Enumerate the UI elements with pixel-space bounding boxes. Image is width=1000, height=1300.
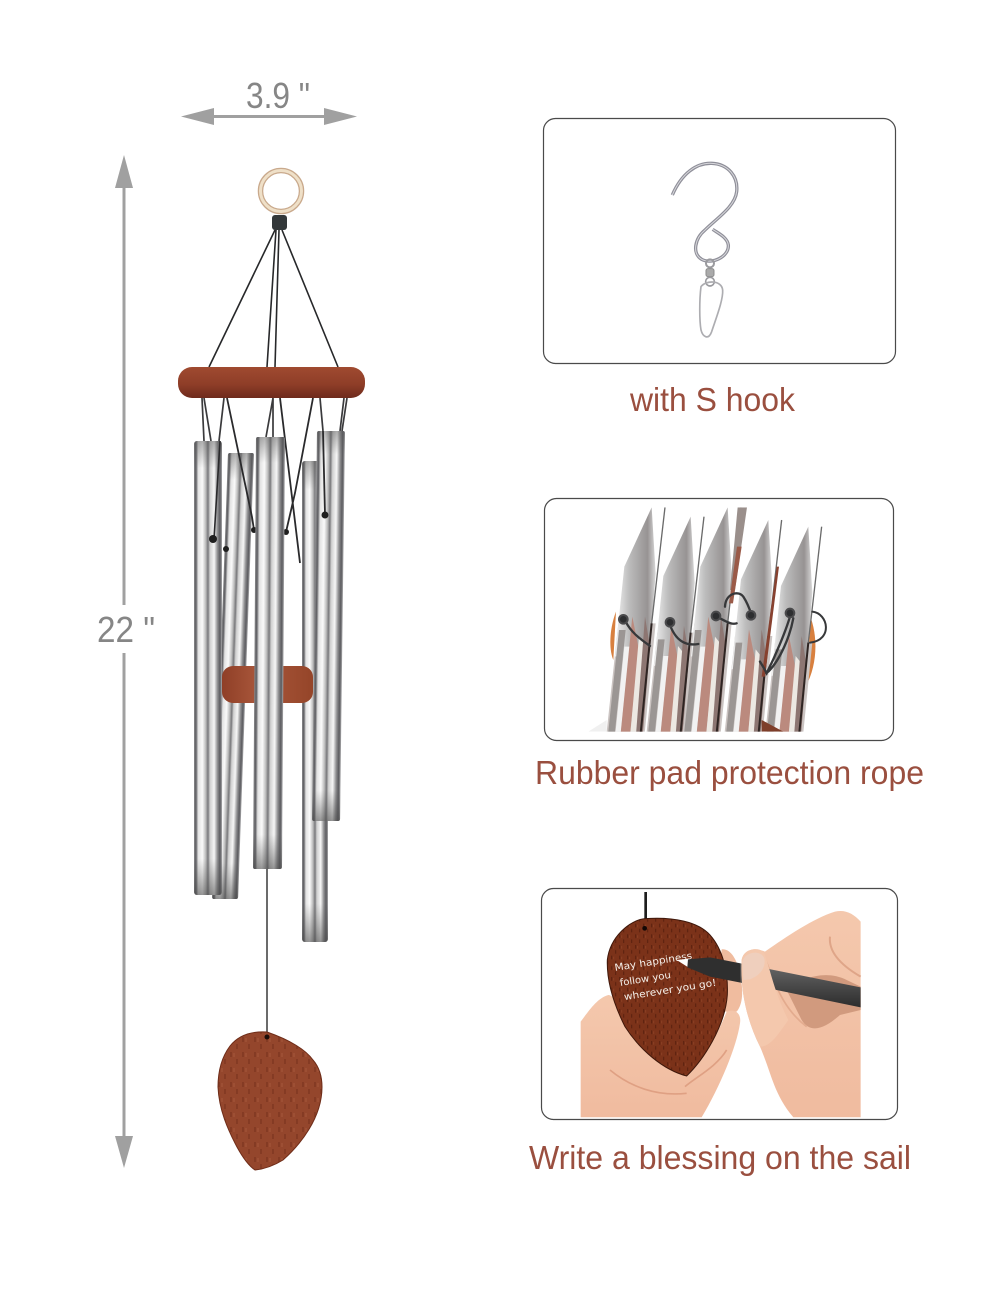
tube 3 bbox=[253, 437, 285, 869]
caption: with S hook: with S hook bbox=[629, 381, 795, 418]
photo: hands writing on sail bbox=[581, 892, 861, 1117]
hanging ring bbox=[260, 170, 302, 230]
handwritten blessing: follow you bbox=[619, 970, 672, 989]
panel: rubber pad protection rope bbox=[544, 498, 894, 742]
photo: tubes with rope bbox=[589, 507, 827, 732]
caption: rubber pad protection rope: Rubber pad protection rope bbox=[535, 754, 924, 791]
small sail bbox=[607, 918, 727, 1076]
short ropes behind tubes bbox=[202, 398, 347, 441]
dimension: height 22 inches: 22 " bbox=[97, 609, 155, 650]
right hand bbox=[741, 911, 861, 1117]
dimension: height 22 inches bbox=[97, 155, 155, 1168]
caption: write a blessing on the sail: Write a blessing on the sail bbox=[529, 1139, 911, 1176]
tube 2 bbox=[212, 453, 254, 899]
crossing ropes bbox=[227, 398, 313, 563]
thumb bbox=[741, 949, 788, 1047]
icon: S hook bbox=[672, 163, 737, 337]
middle wooden disc bbox=[222, 666, 313, 703]
string bbox=[642, 892, 650, 929]
dimension: width 3.9 inches: 3.9 " bbox=[246, 75, 310, 116]
wind chime product bbox=[178, 170, 365, 1170]
back tube bbox=[302, 461, 328, 942]
panel: S hook bbox=[544, 118, 896, 364]
upper ropes bbox=[209, 230, 338, 367]
left hand bbox=[581, 949, 742, 1117]
handwritten blessing bbox=[614, 948, 717, 1004]
handwritten blessing: wherever you go! bbox=[623, 978, 717, 1003]
sail string bbox=[266, 869, 268, 1038]
dimension: width 3.9 inches bbox=[181, 75, 357, 125]
top wooden ring bbox=[178, 367, 365, 398]
panel: write a blessing bbox=[542, 888, 898, 1120]
tube 1 bbox=[194, 441, 289, 895]
tube 5 bbox=[312, 431, 345, 821]
pen bbox=[677, 957, 861, 1007]
handwritten blessing: May happiness bbox=[614, 951, 693, 974]
wooden sail bbox=[218, 1032, 322, 1170]
